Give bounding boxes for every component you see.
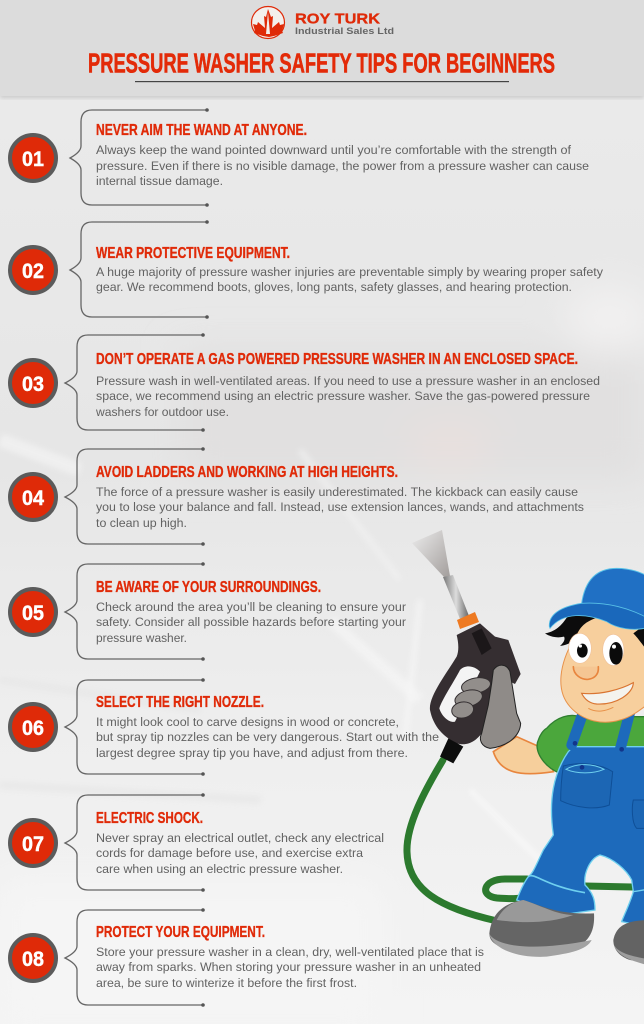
body 01: pressure. Even if there is no visible damage, the power from a pressure washer can cause [96, 159, 589, 173]
number badge 02 [10, 247, 56, 293]
body 02 [96, 265, 604, 294]
tip 04 [10, 447, 584, 546]
worker body (overalls, legs, shoes) [489, 747, 644, 967]
body 05 [96, 600, 406, 645]
body 08: area, be sure to winterize it before the first frost. [96, 976, 357, 990]
tip 07 [10, 793, 384, 892]
number badge 06 [10, 704, 56, 750]
glove [450, 665, 521, 748]
bracket 05 [65, 562, 205, 661]
tip 05 [10, 562, 406, 661]
body 06: but spray tip nozzles can be very dangerous. Start out with the [96, 730, 439, 744]
number badge 08: 08 [22, 948, 44, 971]
heading 02: WEAR PROTECTIVE EQUIPMENT. [96, 245, 290, 262]
body 03: Pressure wash in well-ventilated areas. If you need to use a pressure washer in an enclosed [96, 374, 600, 388]
heading 06: SELECT THE RIGHT NOZZLE. [96, 694, 264, 711]
number badge 08 [10, 935, 56, 981]
body 06: It might look cool to carve designs in wood or concrete, [96, 715, 399, 729]
heading 08: PROTECT YOUR EQUIPMENT. [96, 924, 265, 941]
spray cone [412, 530, 450, 577]
tip 01 [10, 108, 589, 207]
logo: Roy Turk: ROY TURK [295, 12, 381, 28]
body 07 [96, 831, 384, 876]
bracket 03 [65, 333, 205, 432]
body 08 [96, 945, 484, 990]
worker upper body and head [430, 568, 644, 763]
body 03: washers for outdoor use. [95, 405, 229, 419]
nozzle collar [457, 612, 479, 629]
logo: Roy Turk: Industrial Sales Ltd [295, 26, 394, 37]
body 04: you to lose your balance and fall. Instead, use extension lances, wands, and attachments [96, 500, 584, 514]
arm and shirt [493, 715, 644, 774]
header band [0, 0, 644, 98]
body 01 [96, 143, 589, 188]
body 04: to clean up high. [96, 516, 187, 530]
heading 07: ELECTRIC SHOCK. [96, 810, 203, 827]
number badge 07: 07 [22, 833, 44, 856]
heading 04: AVOID LADDERS AND WORKING AT HIGH HEIGHTS. [96, 464, 398, 481]
logo: Roy Turk [252, 6, 394, 38]
body 04: The force of a pressure washer is easily underestimated. The kickback can easily cause [96, 485, 578, 499]
body 02: A huge majority of pressure washer injuries are preventable simply by wearing proper safety [96, 265, 604, 279]
tip 06 [10, 678, 439, 776]
body 08: Store your pressure washer in a clean, dry, well-ventilated place that is [96, 945, 484, 959]
number badge 05: 05 [22, 602, 44, 625]
body 07: cords for damage before use, and exercise extra [96, 846, 363, 860]
number badge 02: 02 [22, 260, 44, 283]
bracket 08 [65, 908, 205, 1007]
heading 05: BE AWARE OF YOUR SURROUNDINGS. [96, 579, 321, 596]
bracket 04 [65, 447, 205, 546]
body 03 [95, 374, 600, 419]
body 06 [96, 715, 439, 760]
mouth [582, 683, 633, 704]
body 05: pressure washer. [96, 631, 187, 645]
body 01: Always keep the wand pointed downward until you’re comfortable with the strength of [96, 143, 572, 157]
cap [582, 568, 644, 620]
number badge 05 [10, 589, 56, 635]
face [561, 615, 644, 722]
body 05: safety. Consider all possible hazards before starting your [96, 615, 406, 629]
body 06: largest degree spray tip you have, and adjust from there. [96, 746, 408, 760]
tip 03 [10, 333, 600, 432]
body 07: care when using an electric pressure washer. [96, 862, 343, 876]
tip 02 [10, 220, 604, 319]
nose [573, 667, 598, 679]
bracket 06 [65, 678, 205, 776]
number badge 01 [10, 135, 56, 181]
eyes [569, 633, 591, 663]
bracket 02 [70, 220, 209, 319]
illustration: cartoon worker with pressure washer [412, 530, 644, 967]
number badge 03 [10, 360, 56, 406]
tip 08 [10, 908, 484, 1007]
bracket 01 [70, 108, 209, 207]
number badge 01: 01 [22, 148, 44, 171]
body 01: internal tissue damage. [96, 174, 223, 188]
body 02: gear. We recommend boots, gloves, long pants, safety glasses, and hearing protection. [96, 280, 572, 294]
body 08: away from sparks. When storing your pressure washer in an unheated [96, 960, 481, 974]
hair [545, 615, 600, 646]
number badge 06: 06 [22, 717, 44, 740]
body 07: Never spray an electrical outlet, check any electrical [96, 831, 384, 845]
body 03: space, we recommend using an electric pressure washer. Save the gas-powered pressure [96, 389, 590, 403]
overall straps [572, 712, 630, 750]
number badge 07 [10, 820, 56, 866]
number badge 04: 04 [22, 487, 44, 510]
bracket 07 [65, 793, 205, 892]
heading 01: NEVER AIM THE WAND AT ANYONE. [96, 122, 307, 139]
number badge 04 [10, 474, 56, 520]
number badge 03: 03 [22, 373, 44, 396]
icon: green hose [407, 760, 632, 921]
body 04 [96, 485, 584, 530]
body 05: Check around the area you’ll be cleaning to ensure your [96, 600, 406, 614]
gun [439, 666, 480, 722]
hose connector [440, 738, 463, 763]
wand [443, 575, 469, 619]
